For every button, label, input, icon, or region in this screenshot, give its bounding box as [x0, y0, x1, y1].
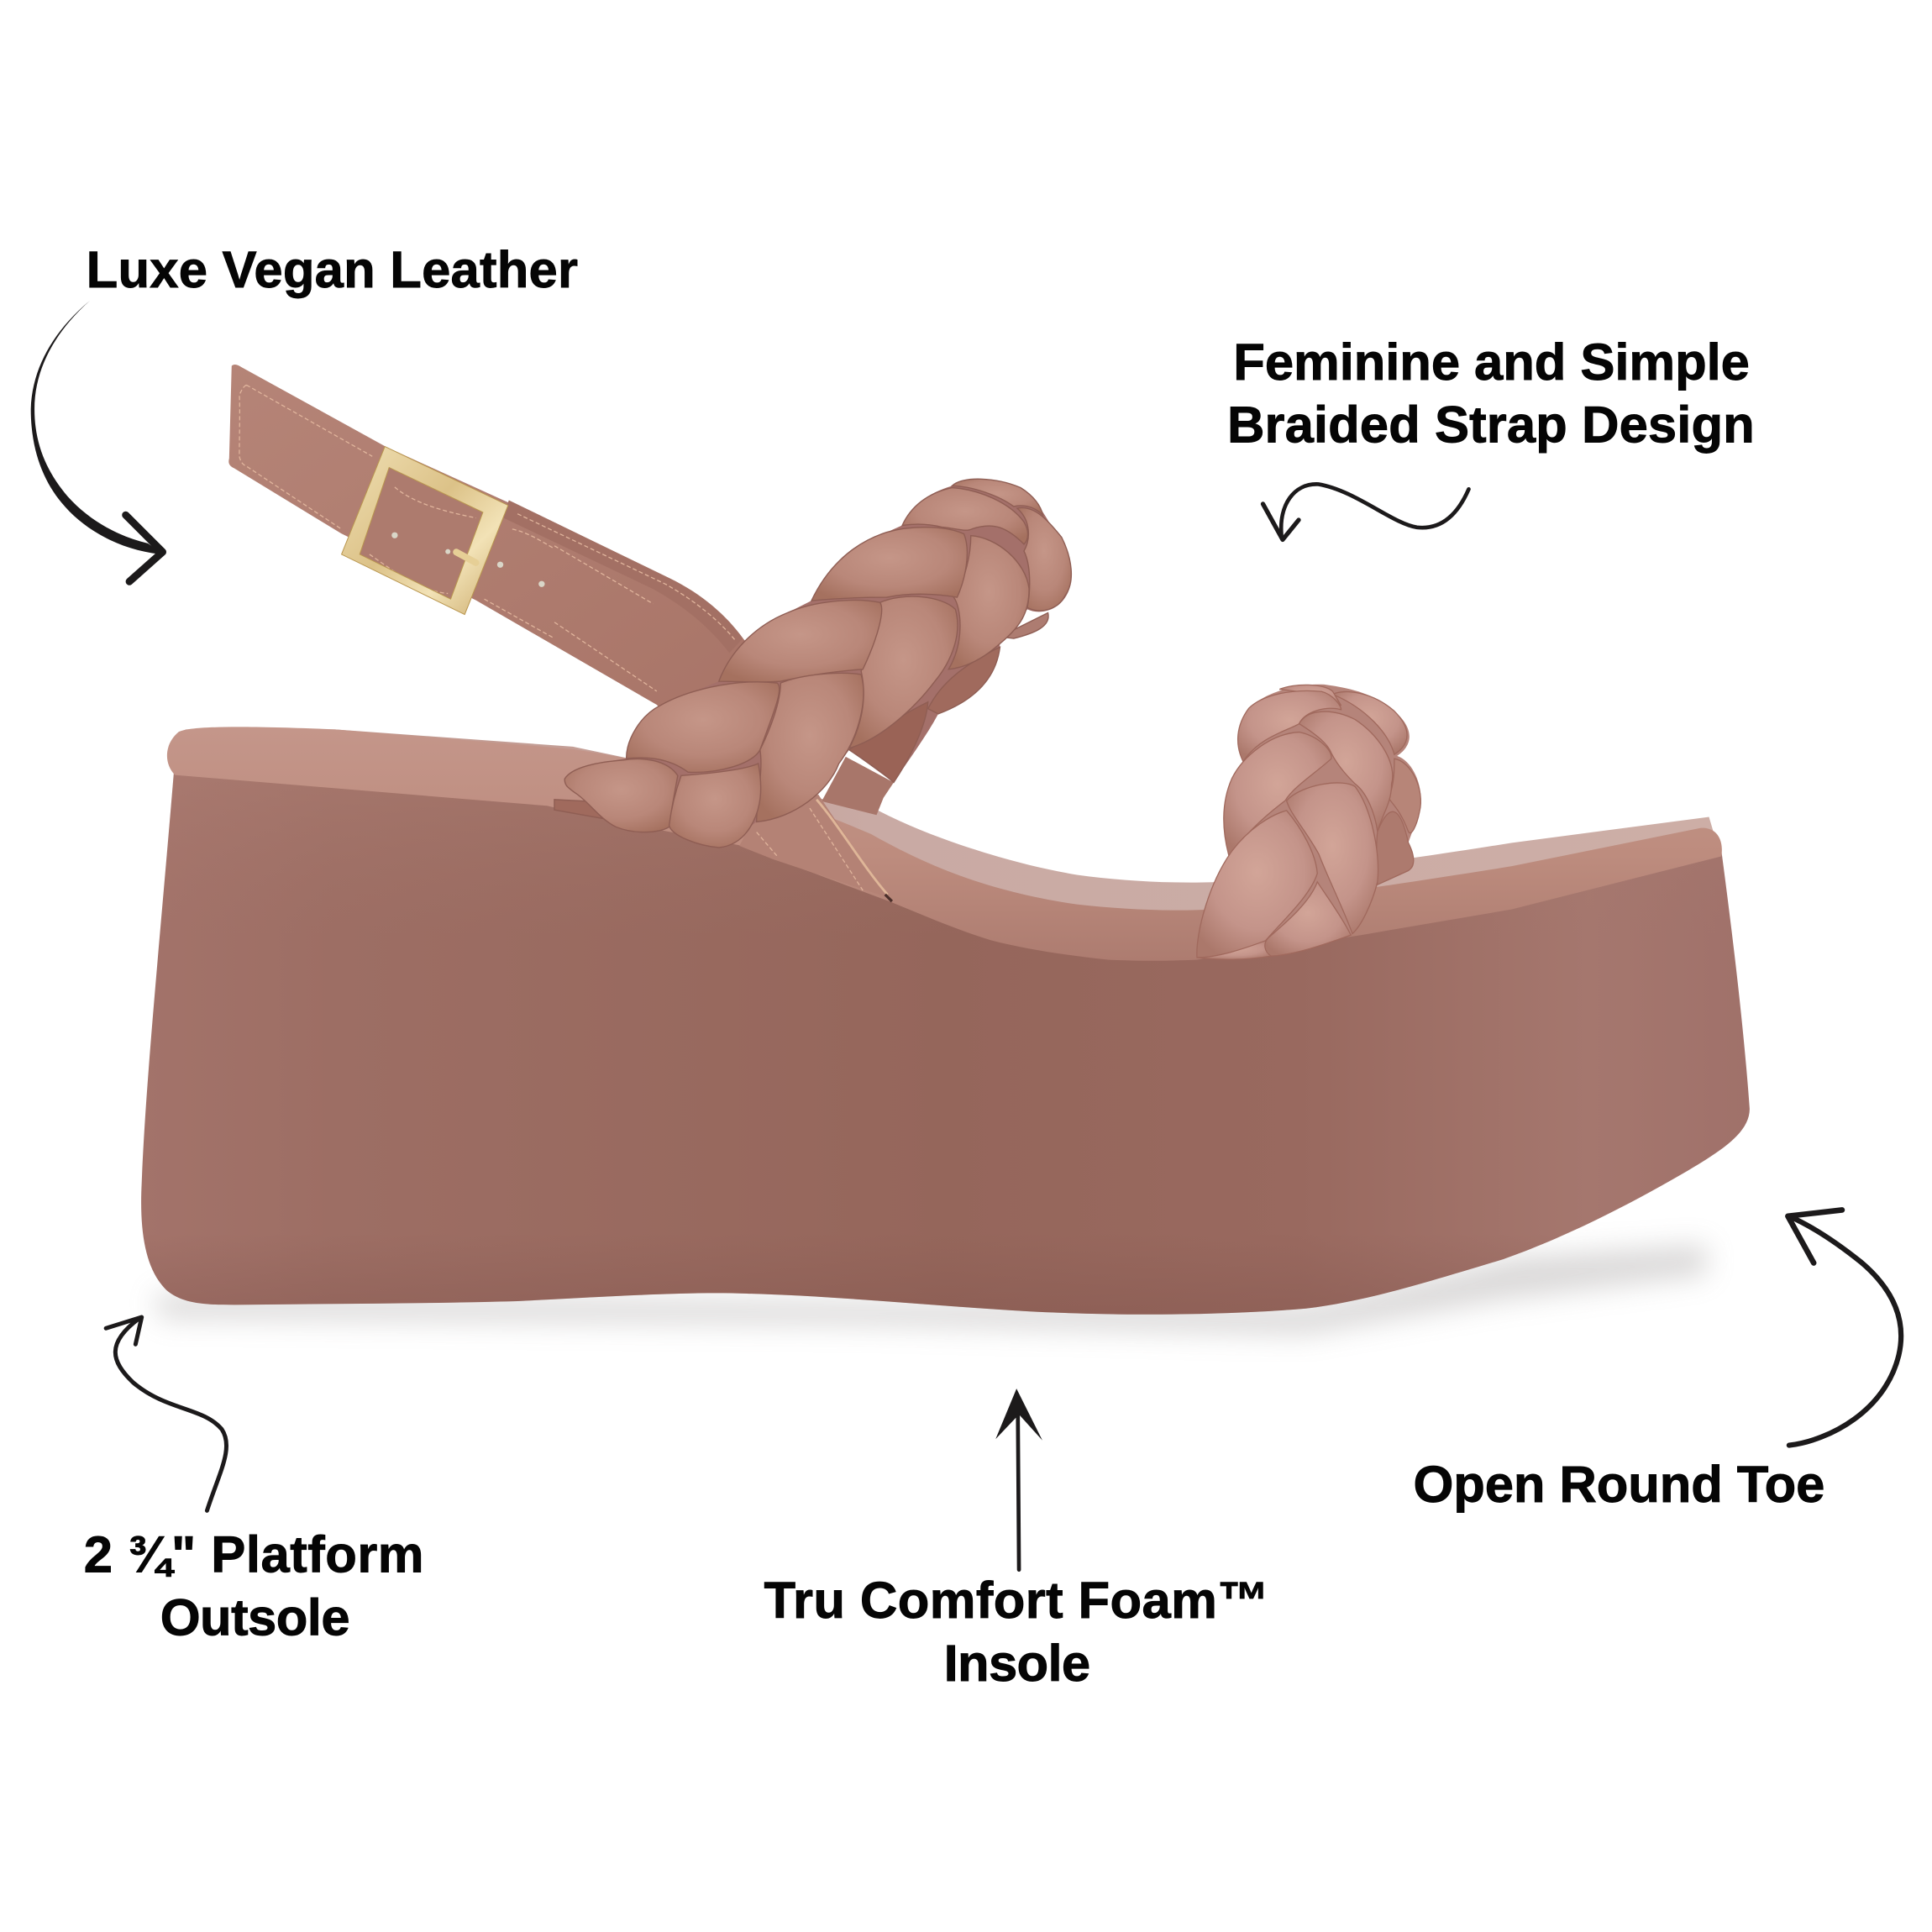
label: braided strap design — [1227, 333, 1755, 454]
label: Tru Comfort Foam insole: Tru Comfort Foam™ — [764, 1572, 1269, 1630]
label: Tru Comfort Foam insole: Insole — [944, 1635, 1090, 1693]
arrow: platform — [106, 1317, 227, 1510]
heel strap with stitching — [228, 365, 764, 739]
label: open round toe: Open Round Toe — [1413, 1456, 1824, 1514]
arrow: insole — [995, 1389, 1042, 1570]
sandal photograph illustration — [141, 365, 1750, 1335]
label: Tru Comfort Foam insole — [764, 1572, 1269, 1693]
foam foxing band — [167, 727, 1722, 961]
arrow: toe — [1788, 1210, 1901, 1446]
label: platform outsole: 2 ¾" Platform — [84, 1526, 424, 1584]
label: platform outsole: Outsole — [160, 1588, 350, 1646]
arrow: braided strap — [1263, 484, 1468, 539]
rear braided strap — [554, 479, 1071, 848]
label: braided strap design: Feminine and Simple — [1233, 333, 1750, 391]
arrow: leather — [31, 301, 164, 581]
label: braided strap design: Braided Strap Design — [1227, 396, 1755, 454]
gold buckle — [342, 447, 545, 615]
front braided strap — [1197, 685, 1421, 959]
inner strap piece with gold edge — [739, 757, 894, 901]
platform outsole — [141, 774, 1750, 1315]
insole footbed — [185, 729, 1719, 942]
ground shadow — [154, 1245, 1707, 1335]
label: platform outsole — [84, 1526, 424, 1646]
label: Luxe Vegan Leather: Luxe Vegan Leather — [87, 241, 578, 299]
